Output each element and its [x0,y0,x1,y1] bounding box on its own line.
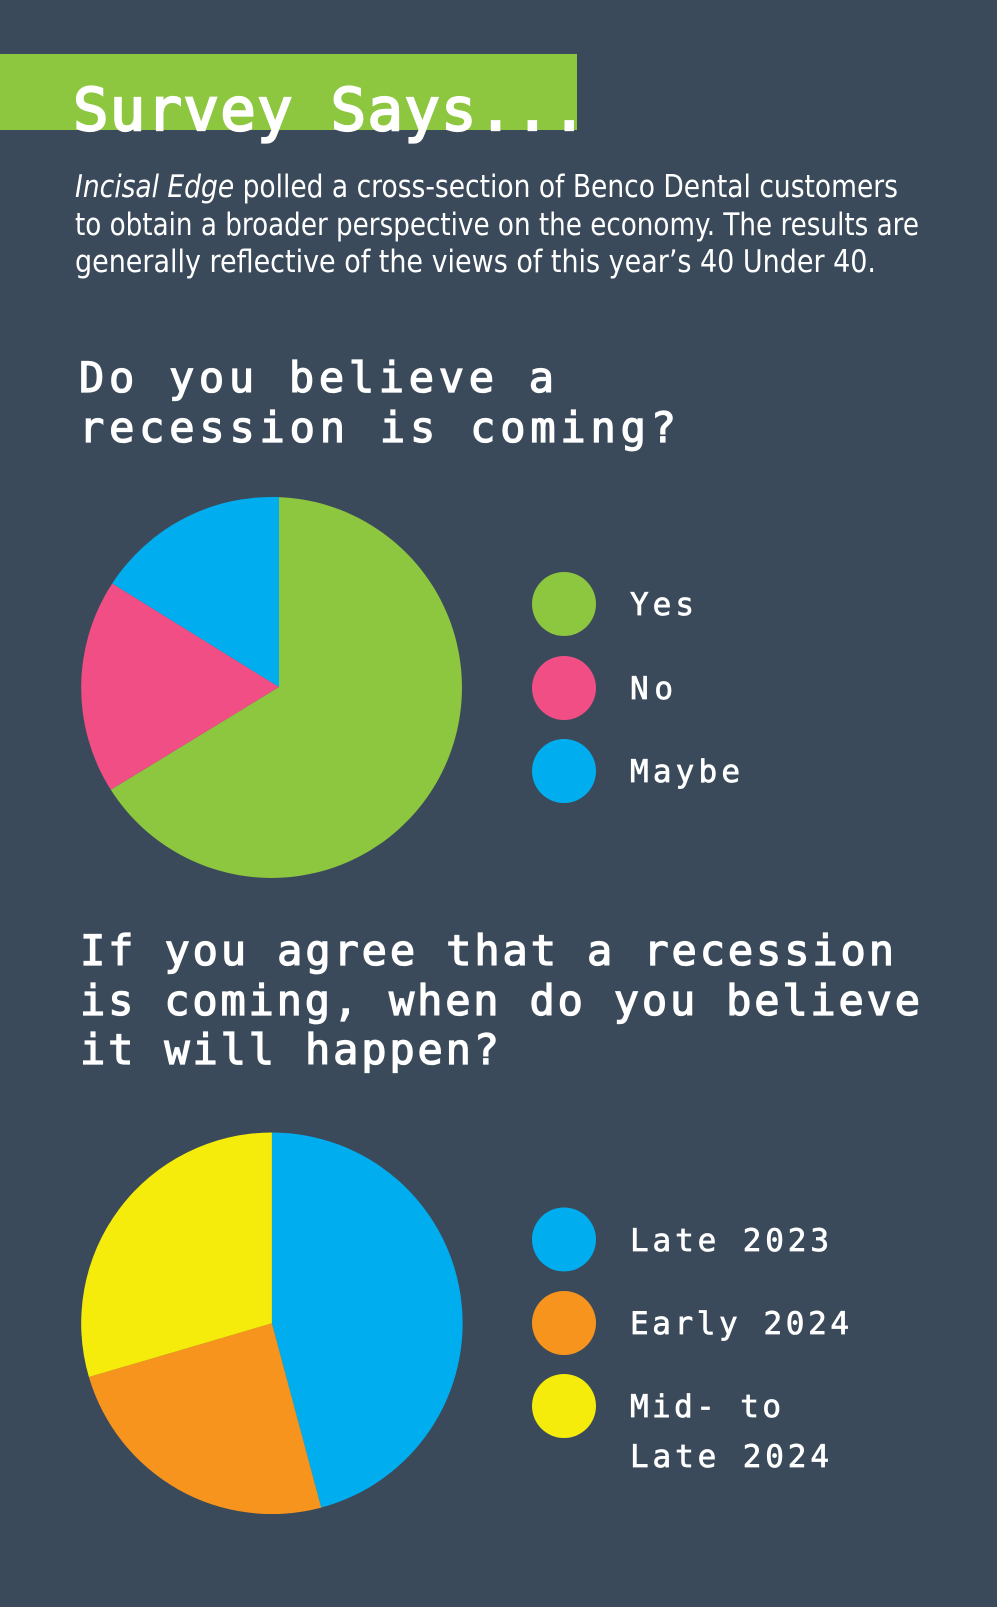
intro paragraph: generally reflective of the views of this year’s 40 Under 40. [75,244,876,280]
question 1 heading: recession is coming? [79,403,676,452]
slice: no [81,584,279,790]
question 2 heading: If you agree that a recession [80,926,894,975]
legend item: mid to late 2024: Late 2024 [630,1439,829,1475]
title banner [0,54,577,130]
question 2 heading: is coming, when do you believe [80,976,920,1025]
legend item: maybe: Maybe [630,754,740,790]
question 2 heading [80,926,920,1074]
legend: timing [532,1208,849,1475]
legend item: no [532,656,673,720]
legend item: mid to late 2024 [532,1374,829,1475]
legend item: late 2023 [532,1208,829,1272]
slice: mid to late 2024 [81,1132,272,1377]
intro paragraph [75,169,919,280]
question 1 heading [79,353,676,452]
slice: yes [111,497,462,878]
question 1 heading: Do you believe a [79,353,554,402]
title: Survey Says... [73,75,587,144]
legend item: mid to late 2024: Mid- to [630,1389,781,1425]
slice: late 2023 [272,1132,463,1508]
legend item: yes [532,572,694,636]
legend: recession coming [532,572,740,803]
legend item: early 2024 [532,1291,849,1355]
question 2 heading: it will happen? [80,1025,499,1074]
legend item: early 2024: Early 2024 [630,1306,849,1342]
slice: early 2024 [89,1323,321,1514]
legend item: yes: Yes [630,587,694,623]
pie chart: timing [81,1132,463,1514]
legend item: late 2023: Late 2023 [630,1223,829,1259]
pie chart: recession coming [81,497,462,878]
legend item: no: No [630,671,673,707]
legend item: maybe [532,739,740,803]
slice: maybe [112,497,279,687]
intro paragraph: Incisal Edge polled a cross-section of Benco Dental customers [75,169,898,205]
